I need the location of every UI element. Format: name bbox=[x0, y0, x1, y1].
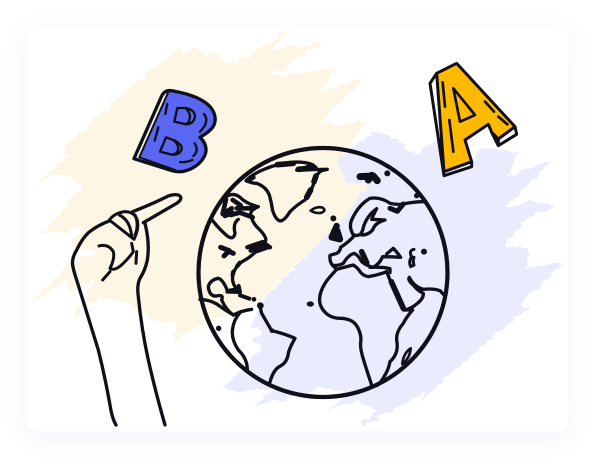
background card bbox=[27, 27, 568, 431]
brush stroke: yellow bbox=[30, 30, 370, 343]
Caribbean bbox=[227, 286, 249, 299]
folded fingers bbox=[99, 243, 137, 280]
Red Sea bbox=[391, 282, 403, 308]
arm outer edge bbox=[72, 221, 116, 425]
British Isles bbox=[332, 226, 340, 239]
Nova Scotia bbox=[247, 242, 270, 251]
pointing hand bbox=[72, 195, 181, 425]
Greenland bbox=[246, 162, 327, 221]
Canadian archipelago bbox=[223, 199, 254, 217]
North America bbox=[208, 194, 269, 315]
continents bbox=[200, 162, 445, 385]
brush stroke: lavender bbox=[222, 132, 562, 428]
knuckle bbox=[109, 212, 138, 239]
Mediterranean north coast bbox=[330, 247, 401, 267]
letter B bbox=[134, 91, 215, 172]
globe bbox=[198, 148, 448, 397]
Madagascar bbox=[402, 348, 411, 364]
Africa bbox=[320, 265, 413, 385]
Arabia bbox=[405, 277, 445, 310]
Great Lakes bbox=[221, 247, 233, 256]
globe outline bbox=[198, 148, 448, 397]
Svalbard bbox=[360, 175, 377, 181]
Scandinavia and Europe north coast bbox=[341, 198, 423, 247]
Hudson Bay bbox=[213, 219, 238, 238]
Cape Verde bbox=[307, 301, 314, 307]
letter A bbox=[430, 63, 517, 176]
arm inner edge bbox=[138, 223, 165, 425]
Caspian Sea bbox=[410, 249, 414, 267]
Iceland bbox=[311, 207, 324, 213]
South America bbox=[232, 304, 295, 382]
Eastern seaboard thick bbox=[233, 263, 240, 275]
index finger bbox=[133, 195, 181, 223]
